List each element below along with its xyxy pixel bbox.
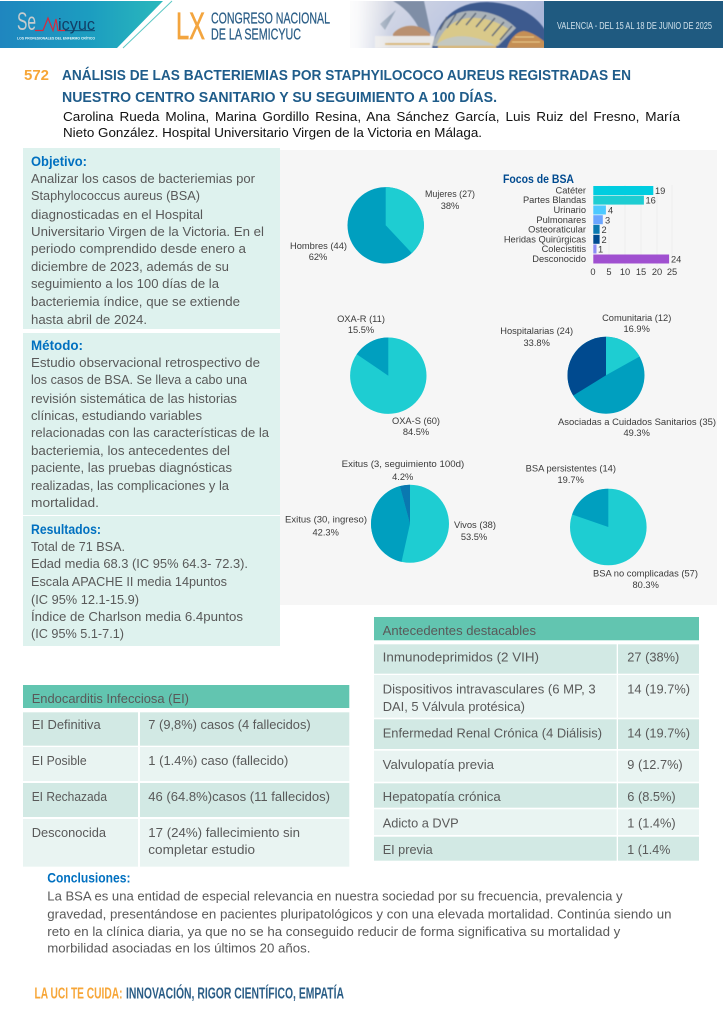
pie chart: persistencia: BSA persistentes (14) — [526, 464, 616, 474]
abstract number: 572 — [24, 67, 49, 84]
category labels: Pulmonares — [536, 215, 586, 225]
congress name: LX — [176, 6, 205, 48]
pie chart: persistencia: 19.7% — [558, 475, 584, 485]
panel: metodo: Estudio observacional retrospectivo de — [31, 355, 260, 370]
table: endocarditis infecciosa: Desconocida — [32, 825, 107, 840]
bar chart: focos de BSA — [503, 174, 681, 277]
logo: SEMICYUC — [17, 8, 95, 40]
congress name: DE LA SEMICYUC — [211, 26, 301, 44]
pie chart: mortalidad: Exitus (30, ingreso) — [285, 515, 367, 525]
panel: resultados: Edad media 68.3 (IC 95% 64.3- 72.3). — [31, 556, 248, 571]
table: antecedentes destacables: Valvulopatía previa — [383, 757, 495, 772]
pie chart: persistencia: BSA no complicadas (57) — [593, 569, 698, 579]
panel: objetivo: Analizar los casos de bacteriemias por — [31, 171, 256, 186]
pie chart: oxacilina: OXA-S (60) — [392, 416, 440, 426]
axis: 0 — [590, 267, 596, 277]
category labels: Urinario — [553, 205, 586, 215]
panel: objetivo — [23, 148, 280, 329]
pie chart: adquisicion: Hospitalarias (24) — [500, 326, 573, 336]
panel: objetivo: periodo comprendido desde enero a — [31, 241, 247, 256]
authors: Carolina Rueda Molina, Marina Gordillo Resina, Ana Sánchez García, Luis Ruiz del Fresno, María — [63, 110, 680, 124]
congress name — [176, 6, 330, 48]
panel: metodo: clínicas, estudiando variables — [31, 408, 202, 423]
panel: objetivo: Objetivo: — [31, 154, 87, 169]
table: endocarditis infecciosa: 17 (24%) fallecimiento sin — [148, 825, 300, 840]
panel: metodo: bacteriemia, los antecedentes del — [31, 443, 230, 458]
pie chart: mortalidad — [285, 459, 496, 563]
panel: resultados — [23, 516, 280, 646]
authors — [63, 110, 680, 140]
value labels: 16 — [646, 196, 656, 206]
value labels: 3 — [605, 215, 610, 225]
table: antecedentes destacables: Antecedentes destacables — [383, 623, 536, 638]
date band — [544, 1, 723, 48]
axis: 15 — [636, 267, 646, 277]
authors: Nieto González. Hospital Universitario Virgen de la Victoria en Málaga. — [63, 126, 482, 140]
table: antecedentes destacables: 1 (1.4%) — [627, 816, 676, 831]
footer slogan: INNOVACIÓN, RIGOR CIENTÍFICO, EMPATÍA — [126, 984, 344, 1002]
pie chart: adquisicion: 33.8% — [524, 338, 550, 348]
pie chart: adquisicion: Comunitaria (12) — [602, 313, 671, 323]
value labels: 1 — [598, 245, 603, 255]
pie chart: mortalidad: 53.5% — [461, 532, 487, 542]
pie chart: mortalidad: 42.3% — [313, 528, 339, 538]
table: endocarditis infecciosa: completar estudio — [148, 842, 255, 857]
pie chart: oxacilina — [337, 314, 440, 437]
pie chart: persistencia: 80.3% — [633, 580, 659, 590]
panel: metodo: realizadas, las complicaciones y la — [31, 478, 230, 493]
table: endocarditis infecciosa: EI Posible — [32, 753, 87, 768]
panel: objetivo: Staphylococcus aureus (BSA) — [31, 188, 200, 203]
pie chart: persistencia — [526, 464, 698, 590]
table: antecedentes destacables: EI previa — [383, 842, 433, 857]
panel: objetivo: diciembre de 2023, además de su — [31, 259, 229, 274]
conclusiones: gravedad, presentándose en pacientes pluripatológicos y con una elevada mortalidad. Continúa siendo un — [47, 906, 672, 921]
table: antecedentes destacables: 6 (8.5%) — [627, 789, 676, 804]
panel: objetivo: diagnosticadas en el Hospital — [31, 207, 203, 222]
table: antecedentes destacables: 14 (19.7%) — [627, 725, 690, 740]
panel: metodo: Método: — [31, 338, 83, 353]
table: endocarditis infecciosa: EI Definitiva — [32, 717, 101, 732]
table: antecedentes destacables: 14 (19.7%) — [627, 681, 690, 696]
table: antecedentes destacables: Inmunodeprimidos (2 VIH) — [383, 650, 539, 665]
table: endocarditis infecciosa: 46 (64.8%)casos (11 fallecidos) — [148, 789, 330, 804]
pie chart: mortalidad: Vivos (38) — [454, 520, 496, 530]
pie chart: adquisicion — [500, 313, 716, 438]
pie chart: sexo: Hombres (44) — [290, 241, 347, 251]
table: endocarditis infecciosa: 7 (9,8%) casos (4 fallecidos) — [148, 717, 311, 732]
value labels: 2 — [602, 225, 607, 235]
category labels: Osteoraticular — [528, 224, 586, 234]
conclusiones: Conclusiones: — [47, 871, 130, 886]
pie chart: adquisicion: 49.3% — [624, 428, 650, 438]
pie chart: adquisicion: 16.9% — [624, 324, 650, 334]
value labels — [598, 186, 681, 264]
panel: metodo: los casos de BSA. Se lleva a cabo una — [31, 372, 248, 387]
table: antecedentes destacables: Adicto a DVP — [383, 816, 459, 831]
footer slogan — [34, 984, 344, 1002]
axis: 10 — [620, 267, 630, 277]
footer slogan: LA UCI TE CUIDA: — [34, 986, 122, 1002]
panel: resultados: (IC 95% 5.1-7.1) — [31, 626, 124, 641]
congress name: CONGRESO NACIONAL — [211, 10, 330, 28]
conclusiones: La BSA es una entidad de especial relevancia en nuestra sociedad por su frecuencia, prevalencia y — [47, 889, 623, 904]
conclusiones: reto en la clínica diaria, ya que no se ha conseguido reducir de forma significativa su mortalidad y — [47, 924, 621, 939]
table: antecedentes destacables: Enfermedad Renal Crónica (4 Diálisis) — [383, 725, 602, 740]
panel: metodo — [23, 333, 280, 515]
panel: resultados: (IC 95% 12.1-15.9) — [31, 592, 139, 607]
table: endocarditis infecciosa — [23, 685, 349, 867]
category labels: Catéter — [556, 185, 586, 195]
value labels: 2 — [602, 235, 607, 245]
category labels: Colecistitis — [542, 244, 586, 254]
panel: resultados: Total de 71 BSA. — [31, 539, 125, 554]
pie chart: oxacilina: OXA-R (11) — [337, 314, 385, 324]
panel: metodo: paciente, las pruebas diagnósticas — [31, 460, 232, 475]
value labels: 24 — [671, 254, 681, 264]
pie chart: mortalidad: Exitus (3, seguimiento 100d) — [342, 459, 464, 469]
pie chart: oxacilina: 84.5% — [403, 427, 429, 437]
logo band — [0, 1, 172, 48]
value labels: 4 — [608, 206, 613, 216]
table: antecedentes destacables: 1 (1.4% — [627, 842, 671, 857]
axis: 25 — [667, 267, 677, 277]
axis: 20 — [652, 267, 662, 277]
title — [62, 67, 631, 106]
panel: resultados: Escala APACHE II media 14puntos — [31, 574, 227, 589]
bar chart: focos de BSA: Focos de BSA — [503, 174, 574, 186]
logo: SEMICYUC: Se — [17, 8, 36, 36]
pie chart: sexo: 62% — [309, 252, 327, 262]
panel: charts background — [280, 150, 717, 605]
title: ANÁLISIS DE LAS BACTERIEMIAS POR STAPHYILOCOCO AUREUS REGISTRADAS EN — [62, 67, 631, 84]
pie chart: adquisicion: Asociadas a Cuidados Sanitarios (35) — [558, 417, 716, 427]
pie chart: mortalidad: 4.2% — [392, 472, 413, 482]
bars — [593, 186, 669, 264]
panel: objetivo: bacteriemia índice, que se extiende — [31, 294, 240, 309]
pie chart: sexo: Mujeres (27) — [425, 189, 475, 199]
category labels: Desconocido — [532, 254, 586, 264]
table: antecedentes destacables: Dispositivos intravasculares (6 MP, 3 — [383, 681, 596, 696]
table: antecedentes destacables: DAI, 5 Válvula protésica) — [383, 699, 525, 714]
panel: objetivo: hasta abril de 2024. — [31, 312, 147, 327]
icon: Valencia building photo — [340, 0, 545, 49]
table: antecedentes destacables: 9 (12.7%) — [627, 757, 683, 772]
panel: resultados: Resultados: — [31, 522, 101, 537]
table: endocarditis infecciosa: Endocarditis Infecciosa (EI) — [32, 691, 189, 706]
header banner — [0, 0, 723, 49]
table: antecedentes destacables: Hepatopatía crónica — [383, 789, 501, 804]
title: NUESTRO CENTRO SANITARIO Y SU SEGUIMIENTO A 100 DÍAS. — [62, 89, 497, 106]
value labels: 19 — [655, 186, 665, 196]
axis: 5 — [606, 267, 612, 277]
table: antecedentes destacables — [374, 617, 699, 861]
table: antecedentes destacables: 27 (38%) — [627, 650, 679, 665]
panel: objetivo: seguimiento a los 100 días de la — [31, 276, 220, 291]
panel: resultados: Índice de Charlson media 6.4puntos — [31, 609, 244, 624]
category labels: Partes Blandas — [523, 195, 586, 205]
conclusiones: morbilidad asociadas en los últimos 20 años. — [47, 941, 310, 956]
conclusiones — [47, 871, 672, 956]
axis — [590, 267, 677, 277]
logo: SEMICYUC: LOS PROFESIONALES DEL ENFERMO CRÍTICO — [17, 36, 95, 40]
logo: SEMICYUC: icyuc — [58, 15, 95, 34]
panel: metodo: mortalidad. — [31, 495, 99, 510]
pie chart: sexo: 38% — [441, 201, 459, 211]
panel: metodo: revisión sistemática de las historias — [31, 391, 238, 406]
category labels — [504, 185, 586, 264]
table: endocarditis infecciosa: EI Rechazada — [32, 789, 108, 804]
pie chart: sexo — [290, 187, 475, 264]
category labels: Heridas Quirúrgicas — [504, 234, 586, 244]
table: endocarditis infecciosa: 1 (1.4%) caso (fallecido) — [148, 753, 288, 768]
pie chart: oxacilina: 15.5% — [348, 325, 374, 335]
panel: objetivo: Universitario Virgen de la Victoria. En el — [31, 224, 264, 239]
panel: metodo: relacionadas con las características de la — [31, 425, 270, 440]
